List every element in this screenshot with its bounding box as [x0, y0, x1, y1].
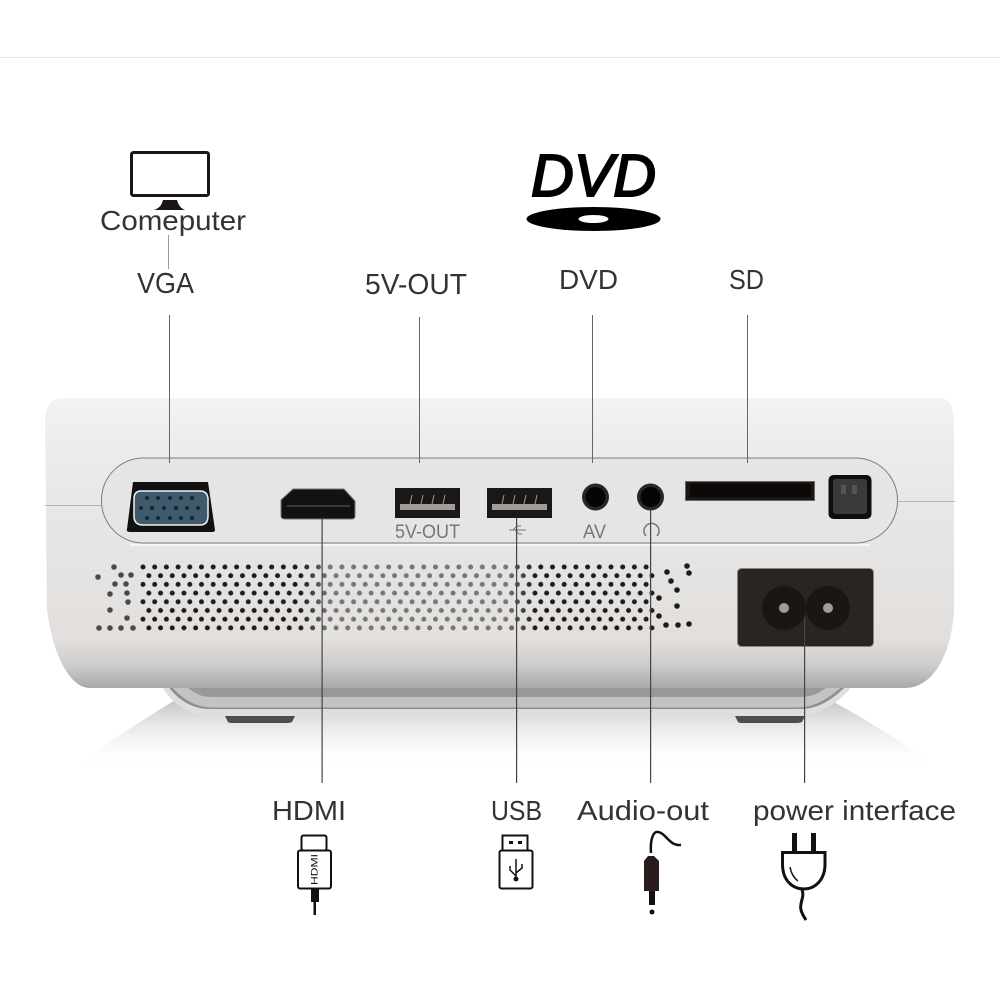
connector line: audio [650, 509, 651, 783]
label: VGA: VGA [137, 268, 195, 300]
port: SD card slot [686, 482, 814, 500]
panel highlight [130, 544, 870, 546]
port: VGA [127, 482, 215, 532]
icon: headphone port symbol [644, 523, 659, 536]
projector foot: left [225, 716, 295, 723]
icon: power plug [782, 833, 825, 920]
connector line: HDMI [322, 519, 323, 783]
port: USB 5V-OUT [395, 488, 460, 518]
connector line: USB [516, 518, 517, 783]
body seam lines [45, 501, 955, 506]
label: DVD: DVD [559, 264, 618, 295]
connector line: power [804, 617, 805, 783]
projector body [45, 398, 954, 688]
port: audio jack [637, 484, 664, 510]
icon: HDMI plug: HDMI [310, 854, 320, 885]
label: 5V-OUT port marking: 5V-OUT [395, 522, 460, 543]
connector line: VGA [169, 315, 170, 463]
connector line: DVD [592, 315, 593, 463]
port: USB [487, 488, 552, 518]
speaker grille [95, 560, 692, 640]
label: SD: SD [729, 264, 764, 295]
label: Audio-out: Audio-out [577, 795, 709, 826]
button: power switch [828, 475, 872, 519]
projector stand [162, 686, 852, 717]
icon: computer monitor [132, 152, 208, 210]
projector foot: right [735, 716, 805, 723]
top divider line [0, 57, 1000, 58]
connector line: 5V-OUT [419, 317, 420, 463]
icon: USB port symbol [509, 526, 526, 534]
port: power socket [738, 568, 874, 646]
port: HDMI [281, 489, 355, 519]
connector line: SD [747, 315, 748, 463]
label: AV port marking: AV [583, 522, 606, 543]
connector line: computer to VGA [168, 235, 169, 269]
icon: DVD logo [526, 143, 660, 231]
label: power interface: power interface [753, 795, 956, 826]
label: HDMI: HDMI [272, 795, 346, 826]
icon: audio plug [644, 832, 681, 914]
icon: HDMI plug [298, 836, 331, 915]
port panel [102, 458, 898, 543]
label: Comeputer: Comeputer [100, 205, 246, 236]
projector shadow [70, 700, 940, 770]
label: USB: USB [491, 795, 542, 826]
port: AV jack [582, 484, 609, 510]
icon: DVD logo: DVD [531, 143, 656, 209]
label: 5V-OUT: 5V-OUT [365, 269, 467, 301]
icon: USB plug [500, 836, 532, 888]
